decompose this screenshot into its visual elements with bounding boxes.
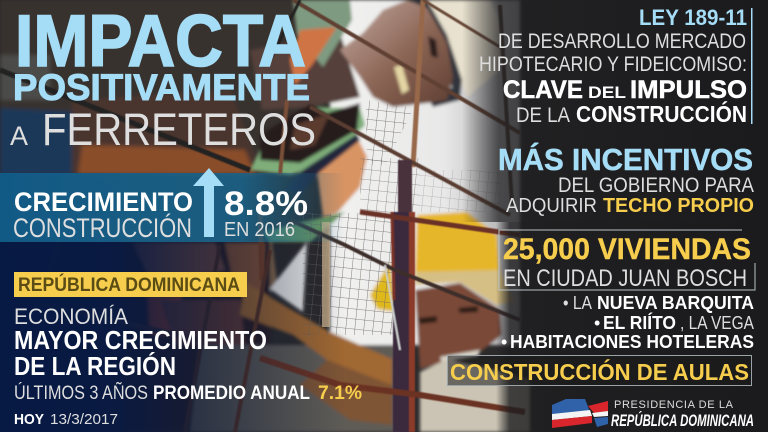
icon: up arrow [193, 168, 224, 237]
project list: HABITACIONES HOTELERAS [510, 332, 754, 352]
project list: • LA [563, 293, 592, 313]
project list: • [594, 313, 600, 333]
economy text block: MAYOR CRECIMIENTO [14, 325, 267, 355]
title: POSITIVAMENTE [13, 67, 310, 108]
project list: • [501, 332, 507, 352]
sky [330, 0, 520, 345]
worker two: yellow helmet [415, 212, 500, 275]
law text block: CONSTRUCCIÓN [576, 100, 747, 127]
date: 13/3/2017 [50, 411, 118, 428]
lower-left base and hands [0, 242, 270, 432]
economy text block: 7.1% [318, 383, 362, 404]
economy text block: ÚLTIMOS 3 AÑOS [14, 382, 148, 404]
incentives text block: TECHO PROPIO [603, 195, 754, 217]
project list: , LA VEGA [680, 313, 754, 333]
worker one: vest shoulder [293, 0, 352, 67]
law text block: DE LA [516, 104, 570, 127]
icon: flag [552, 399, 608, 428]
law text block: LEY 189-11 [639, 5, 747, 30]
economy text block [14, 304, 362, 404]
economy text block: DE LA REGIÓN [14, 351, 176, 381]
incentives text block: ADQUIRIR [506, 195, 597, 217]
housing box [499, 230, 755, 292]
growth figure [224, 185, 308, 241]
worker one: helmet [427, 0, 500, 97]
incentives text block: MÁS INCENTIVOS [498, 142, 753, 177]
title [10, 1, 316, 155]
logo: presidencia [552, 399, 754, 430]
law text block: IMPULSO [630, 76, 747, 104]
law text block: DEL [588, 83, 626, 102]
date [14, 411, 118, 428]
worker one: face [340, 0, 453, 107]
economy text block: PROMEDIO ANUAL [153, 383, 310, 404]
logo: presidencia: PRESIDENCIA DE LA [614, 399, 734, 411]
project list [501, 293, 754, 352]
badge: república dominicana: REPÚBLICA DOMINICANA [18, 274, 240, 296]
worker two: shirt [420, 359, 530, 432]
title: A [10, 121, 28, 151]
worker one: neck and arm [250, 33, 360, 110]
orange beam [240, 282, 392, 385]
date: HOY [14, 411, 44, 428]
project list: EL RIÍTO [603, 312, 676, 333]
law text block: CLAVE [503, 76, 583, 104]
classrooms box: CONSTRUCCIÓN DE AULAS [450, 358, 749, 385]
incentives text block [498, 142, 754, 217]
worker two: face [415, 283, 502, 369]
law text block [479, 5, 752, 127]
growth figure: EN 2016 [224, 219, 295, 241]
housing box: 25,000 VIVIENDAS [503, 233, 751, 266]
rebar [0, 0, 525, 432]
growth label: CRECIMIENTO [14, 187, 193, 217]
growth label: CONSTRUCCIÓN [13, 212, 192, 243]
growth band [0, 168, 345, 242]
wire mesh [303, 100, 500, 335]
title: IMPACTA [15, 1, 306, 82]
title: FERRETEROS [42, 104, 316, 155]
project list: NUEVA BARQUITA [597, 293, 754, 313]
growth label [13, 187, 193, 243]
top-left dark wall [0, 0, 300, 175]
growth figure: 8.8% [224, 185, 308, 223]
worker one: chest [250, 107, 365, 175]
lower stripes [262, 212, 345, 242]
economy text block: ECONOMÍA [14, 304, 128, 329]
